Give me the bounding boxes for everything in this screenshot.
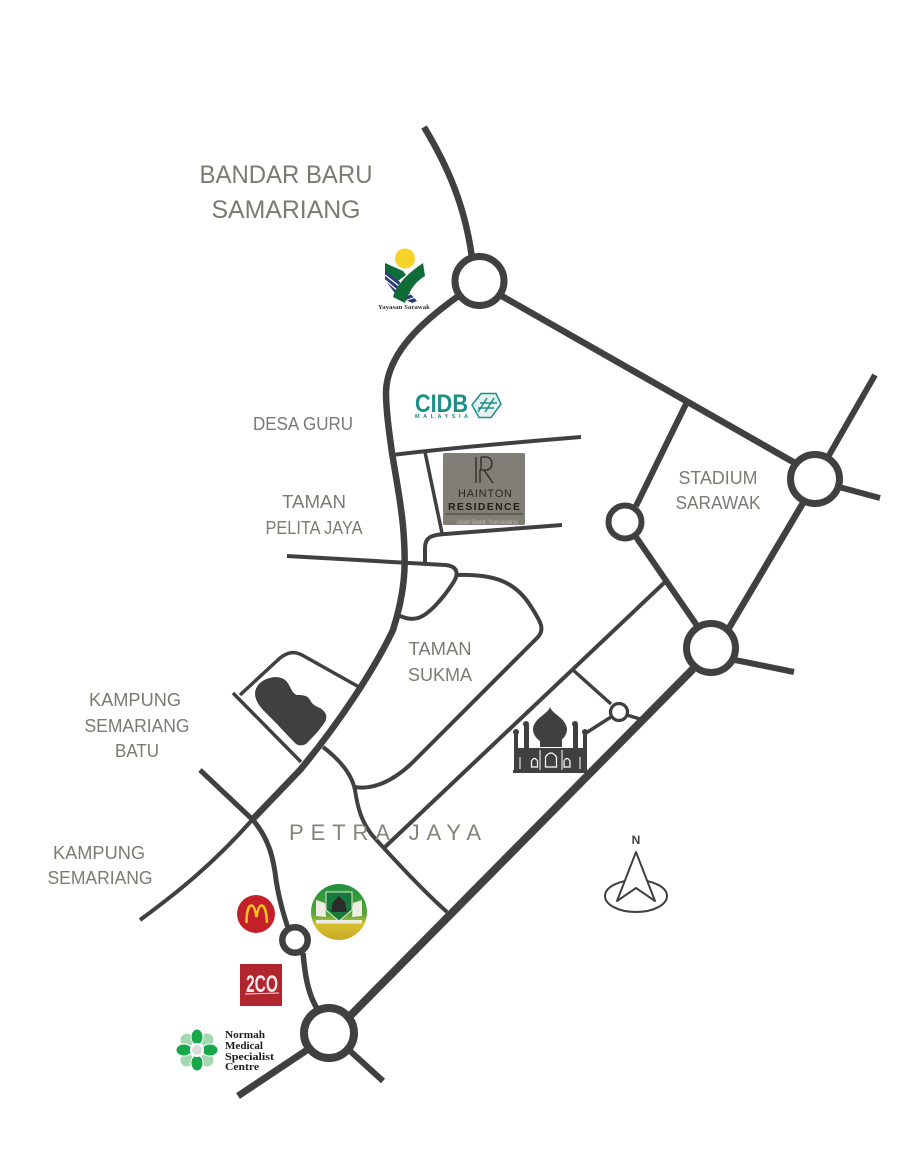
logo: Yayasan Sarawak: Yayasan Sarawak	[378, 304, 430, 311]
label: Kampung Semariang	[48, 843, 152, 888]
road network	[140, 127, 880, 1096]
logo: Hainton Residence: HAINTON	[458, 488, 512, 500]
label: Taman Pelita Jaya	[266, 492, 362, 538]
building footprint	[255, 677, 326, 745]
logo: Normah Medical Specialist Centre: Medical	[225, 1041, 263, 1052]
logo: Hainton Residence: Jalan Bakti, Samariang	[456, 519, 518, 526]
logo: Normah Medical Specialist Centre: Centre	[225, 1062, 260, 1073]
logo: Normah Medical Specialist Centre: Normah	[225, 1030, 265, 1041]
label: Taman Sukma	[408, 639, 472, 685]
logo: 2CO	[240, 964, 282, 1006]
logo: CIDB Malaysia	[415, 390, 501, 420]
label: Taman Pelita Jaya: TAMAN	[282, 492, 346, 512]
logo: state crest	[311, 884, 367, 940]
roundabouts	[282, 256, 840, 1058]
logo: McDonald's	[237, 895, 275, 933]
label: Kampung Semariang Batu	[84, 690, 190, 761]
label: Kampung Semariang Batu: KAMPUNG	[89, 690, 181, 710]
logo: CIDB Malaysia: MALAYSIA	[415, 414, 468, 420]
icon: mosque	[513, 707, 588, 773]
logo: Hainton Residence	[443, 453, 525, 526]
icon: north compass: N	[632, 833, 640, 847]
label: Taman Sukma: TAMAN	[408, 639, 472, 659]
label: Stadium Sarawak: STADIUM	[678, 468, 758, 488]
label: Stadium Sarawak: SARAWAK	[676, 493, 760, 513]
logo: Hainton Residence: RESIDENCE	[448, 501, 520, 513]
label: Kampung Semariang: KAMPUNG	[53, 843, 145, 863]
area labels: SAMARIANG	[212, 196, 360, 224]
logo: Normah Medical Specialist Centre	[176, 1029, 275, 1073]
label: Taman Pelita Jaya: PELITA JAYA	[266, 518, 362, 538]
label: Taman Sukma: SUKMA	[408, 665, 472, 685]
heading: Bandar Baru Samariang: BANDAR BARU	[200, 161, 372, 189]
logo: Normah Medical Specialist Centre: Specialist	[225, 1052, 275, 1063]
icon: north compass	[605, 833, 667, 912]
area labels	[48, 161, 760, 888]
label: Desa Guru: DESA GURU	[253, 414, 353, 434]
label: Kampung Semariang: SEMARIANG	[48, 868, 152, 888]
label: Petra Jaya: PETRA JAYA	[289, 820, 481, 845]
label: Kampung Semariang Batu: BATU	[115, 741, 159, 761]
label: Kampung Semariang Batu: SEMARIANG	[84, 716, 190, 736]
logo: CIDB Malaysia: CIDB	[415, 390, 468, 418]
label: Stadium Sarawak	[676, 468, 760, 513]
logo: Yayasan Sarawak	[378, 248, 430, 311]
logo: 2CO: 2CO	[246, 971, 278, 998]
